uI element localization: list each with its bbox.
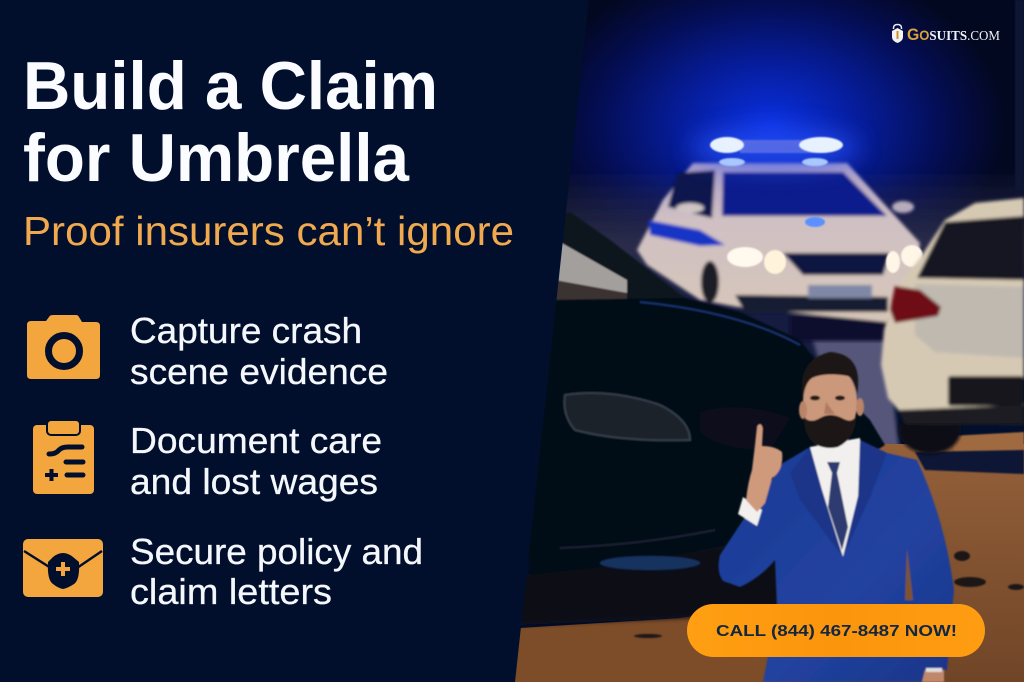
button text: CALL (844) 467-8487 NOW! — [716, 623, 957, 640]
windshield — [722, 172, 887, 216]
dirt ground bottom left — [515, 616, 790, 682]
title — [23, 48, 438, 196]
list item: crash scene evidence — [27, 310, 388, 392]
crashed black car — [515, 212, 885, 625]
right headlight — [886, 251, 900, 273]
blue glass shards — [600, 556, 700, 570]
white car shadow — [915, 450, 1024, 474]
top-right pillar — [1015, 0, 1024, 190]
police car — [637, 163, 920, 341]
lower right beacon — [802, 158, 828, 166]
road behind the cars — [566, 183, 1024, 358]
left ear — [799, 401, 807, 419]
panel: navy text panel — [0, 0, 589, 682]
ground shadow — [515, 540, 800, 625]
icon: logo padlock — [892, 24, 903, 43]
licence plate — [808, 285, 872, 298]
head — [803, 365, 857, 441]
hair — [802, 352, 858, 400]
right ear — [856, 398, 864, 416]
front wheel — [701, 261, 719, 303]
lit road surface — [811, 339, 902, 444]
dirt ground right — [790, 444, 1024, 682]
left beacon — [710, 137, 744, 153]
underside — [898, 405, 1024, 425]
icon: envelope with shield — [23, 539, 103, 597]
blue glow — [690, 128, 860, 168]
right eye — [835, 396, 845, 400]
lower grille — [735, 295, 888, 312]
text: capture crash scene evidence: Capture crash — [130, 310, 362, 351]
logo wordmark: GOSUITS.COM — [907, 25, 1001, 44]
text: document care and lost wages: and lost wages — [130, 461, 378, 502]
hood highlight — [640, 302, 800, 345]
text: secure policy and claim letters: claim letters — [130, 571, 332, 612]
debris on the ground — [634, 551, 1024, 638]
list item: policy and claim letters — [23, 531, 423, 612]
police car shadow — [790, 315, 890, 341]
rear window — [917, 216, 1024, 280]
text: capture crash scene evidence — [130, 310, 388, 392]
white car wheel — [897, 420, 962, 456]
left headlight — [727, 247, 763, 267]
right lapel — [843, 440, 887, 557]
text: secure policy and claim letters: Secure policy and — [130, 531, 423, 572]
gap between arm and torso — [905, 548, 913, 600]
bumper line — [560, 530, 715, 548]
left lapel — [790, 447, 843, 557]
bumper recess — [948, 376, 1024, 406]
background photo: night crash scene — [480, 0, 1024, 682]
text: secure policy and claim letters — [130, 531, 423, 612]
car interior — [555, 280, 627, 304]
mirror — [892, 201, 914, 213]
lit patch beside white car — [950, 432, 1024, 452]
call to action button — [687, 604, 985, 657]
list item: care and lost wages — [33, 420, 382, 502]
nose — [824, 402, 835, 414]
wristwatch — [926, 668, 942, 672]
logo: GoSuits.com — [892, 24, 1001, 44]
beard — [804, 415, 856, 448]
side window — [668, 170, 715, 218]
left eye — [810, 396, 820, 400]
window reflection — [558, 242, 627, 293]
inner headlight — [764, 250, 786, 274]
text: capture crash scene evidence: scene evidence — [130, 351, 388, 392]
blue side stripe — [648, 220, 725, 246]
light bar — [740, 140, 815, 153]
title line 1: Build a Claim — [23, 48, 438, 124]
shirt — [810, 438, 862, 557]
white car — [881, 198, 1024, 454]
emergency lights and headlights — [690, 128, 923, 274]
suit body — [719, 440, 954, 682]
tail light — [890, 286, 941, 323]
a-pillar — [555, 212, 685, 305]
police car body — [637, 163, 920, 322]
text: document care and lost wages — [130, 420, 382, 502]
grille slats — [700, 407, 790, 450]
icon: clipboard — [33, 420, 94, 494]
shirt cuff — [738, 497, 762, 526]
title line 2: for Umbrella — [23, 120, 410, 196]
icon: camera — [27, 315, 100, 379]
grille — [783, 253, 890, 275]
button shape — [687, 604, 985, 657]
subtitle: Proof insurers can’t ignore — [23, 208, 514, 254]
right beacon — [799, 137, 843, 153]
tie — [827, 462, 848, 550]
right hand at bottom — [920, 664, 944, 682]
black car body — [520, 298, 885, 575]
lower left beacon — [719, 158, 745, 166]
night sky with blue glow — [570, 0, 1015, 222]
side mirror reflection — [676, 203, 704, 213]
hand with pointing finger — [746, 424, 782, 512]
lawyer figure in blue suit — [719, 352, 954, 682]
broken headlight — [564, 393, 690, 440]
white car body — [881, 198, 1024, 412]
far right headlight — [901, 245, 923, 267]
rear panel — [915, 284, 1024, 358]
text: document care and lost wages: Document care — [130, 420, 382, 461]
dash light — [805, 217, 825, 227]
